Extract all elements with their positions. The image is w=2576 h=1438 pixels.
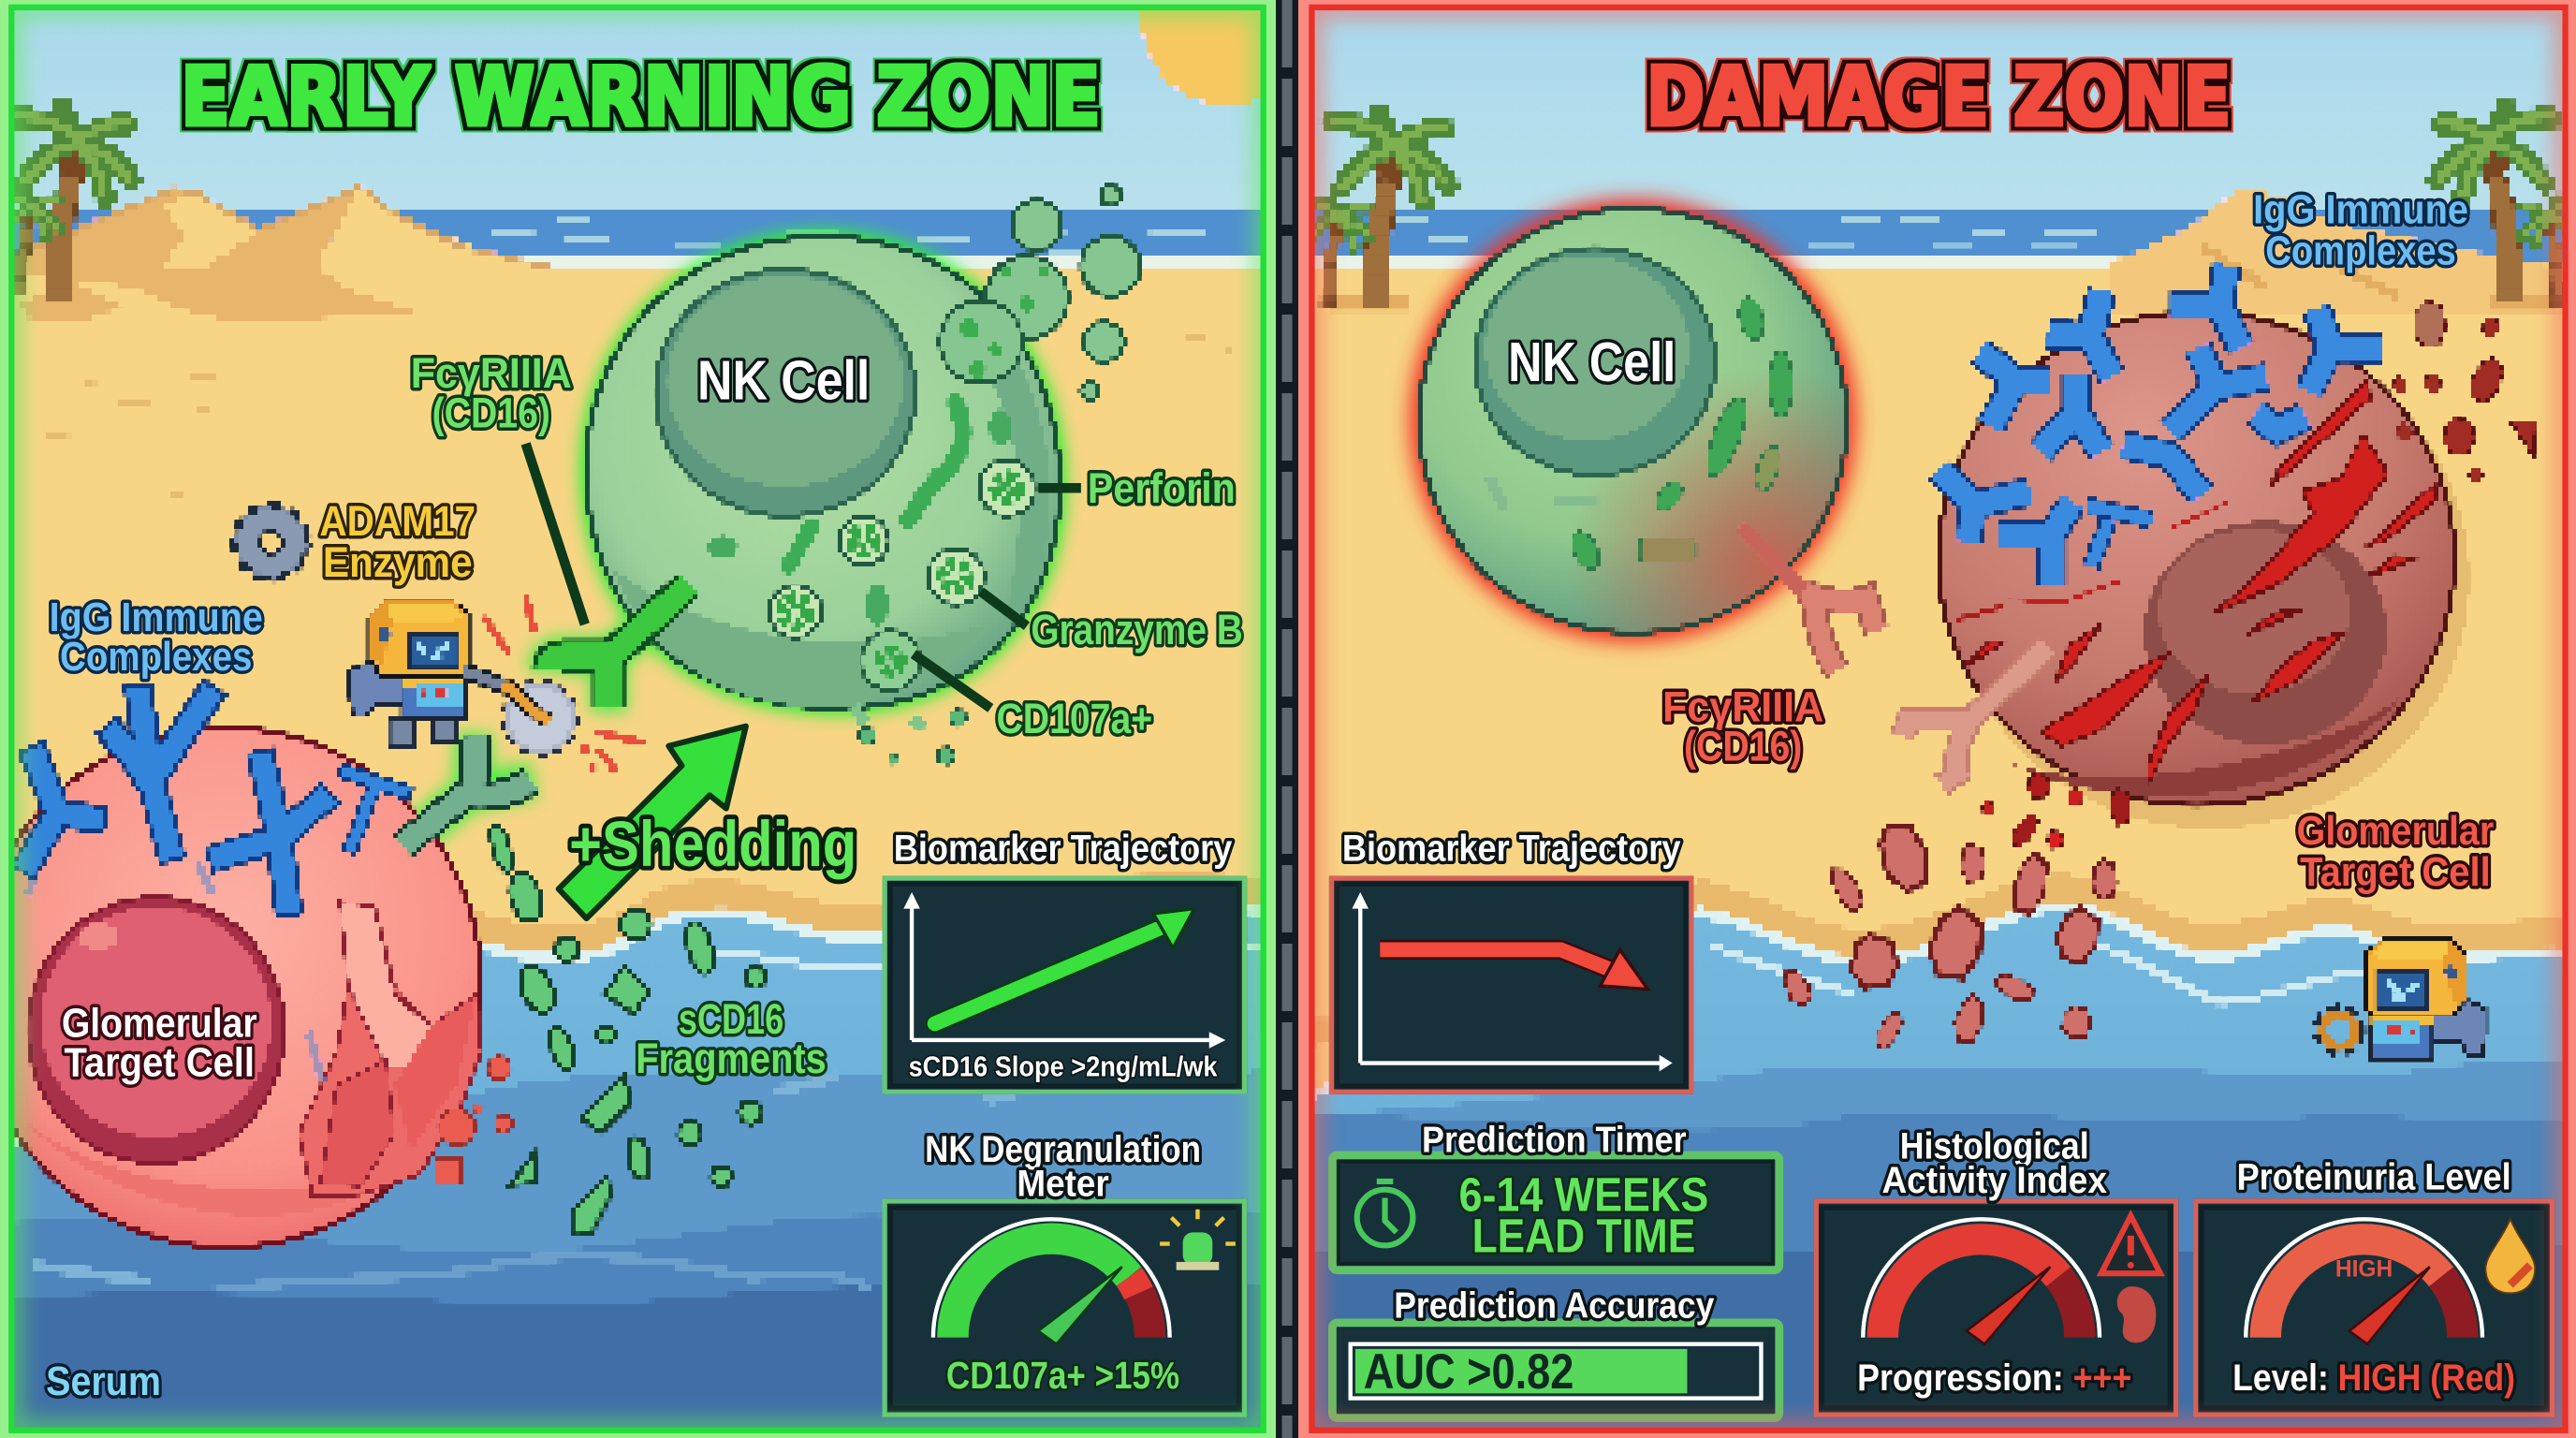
label serum: Serum <box>46 1358 161 1404</box>
fragments left <box>487 822 766 1236</box>
ground shadow <box>1950 329 2469 829</box>
NK degranulation meter: NK Degranulation <box>925 1129 1201 1170</box>
target cell right <box>1939 312 2454 805</box>
robot right <box>2320 940 2485 1058</box>
line to CD16 <box>526 444 585 624</box>
prediction timer: Prediction Timer <box>1422 1120 1687 1160</box>
label Granzyme B: Granzyme B <box>1031 606 1243 653</box>
label Perforin: Perforin <box>1088 464 1236 512</box>
drop icon <box>2485 1219 2535 1293</box>
label FcγRIIIA right: FcγRIIIA <box>1662 682 1823 730</box>
title right: DAMAGE ZONE <box>1647 49 2231 144</box>
receptor wrench left <box>548 583 690 709</box>
NK degranulation meter <box>882 1129 1247 1417</box>
biomarker trajectory left <box>882 829 1247 1094</box>
panel: early warning zone <box>0 0 1312 1438</box>
histological activity index: Activity Index <box>1881 1160 2107 1201</box>
label FcγRIIIA left: FcγRIIIA <box>411 349 572 397</box>
antibodies left <box>30 698 404 902</box>
red slashes <box>1954 382 2438 785</box>
NK cell glow <box>400 230 1066 849</box>
label CD107a: CD107a+ <box>996 695 1152 742</box>
prediction timer: LEAD TIME <box>1472 1209 1695 1262</box>
NK degranulation meter: Meter <box>1017 1164 1109 1205</box>
label glomerular left: Target Cell <box>64 1040 255 1086</box>
biomarker trajectory left: sCD16 Slope >2ng/mL/wk <box>909 1050 1218 1083</box>
NK cell left <box>587 185 1140 764</box>
label NK cell right: NK Cell <box>1508 330 1676 393</box>
histological activity index <box>1814 1125 2178 1417</box>
centre divider <box>1276 0 1298 1438</box>
receptor right <box>1740 526 1876 670</box>
proteinuria level: Level: HIGH (Red) <box>2232 1357 2515 1399</box>
vesicles <box>940 185 1140 399</box>
label FcγRIIIA left: (CD16) <box>432 389 550 436</box>
histological activity index: Progression: +++ <box>1857 1357 2131 1399</box>
proteinuria level: HIGH <box>2335 1257 2393 1283</box>
frame left <box>0 0 1277 1438</box>
label IgG right: IgG Immune <box>2253 187 2468 233</box>
label sCD16 fragments: Fragments <box>636 1034 827 1082</box>
proteinuria level: Proteinuria Level <box>2237 1157 2511 1198</box>
arrow +shedding <box>559 726 746 918</box>
label +Shedding: +Shedding <box>569 808 856 880</box>
label FcγRIIIA right: (CD16) <box>1684 723 1802 770</box>
biomarker trajectory right: Biomarker Trajectory <box>1342 829 1681 870</box>
prediction accuracy <box>1332 1286 1779 1418</box>
biomarker trajectory left: Biomarker Trajectory <box>894 829 1232 870</box>
label sCD16 fragments: sCD16 <box>679 995 783 1043</box>
NK degranulation meter: CD107a+ >15% <box>946 1354 1179 1397</box>
granules <box>768 460 1035 690</box>
stopwatch icon <box>1357 1181 1412 1245</box>
histological activity index: Histological <box>1900 1125 2089 1167</box>
prediction timer <box>1332 1120 1779 1270</box>
label IgG left: IgG Immune <box>50 594 263 640</box>
prediction accuracy: Prediction Accuracy <box>1394 1286 1715 1327</box>
gear icon <box>237 507 305 577</box>
line to Perforin <box>1038 485 1081 491</box>
organelles <box>909 403 962 520</box>
panel: damage zone <box>1298 0 2576 1438</box>
target cell left <box>0 728 481 1247</box>
label ADAM17: ADAM17 <box>319 497 476 545</box>
beach background right <box>1298 0 2576 1438</box>
illustration right <box>1419 209 2537 1058</box>
debris lower <box>1778 817 2116 1051</box>
debris upper <box>1982 301 2537 850</box>
beacon icon <box>1160 1210 1236 1270</box>
second receptor right <box>1902 648 2047 785</box>
label glomerular right: Glomerular <box>2297 808 2494 854</box>
frame right <box>1298 0 2576 1438</box>
NK cell glow right <box>1410 198 1856 642</box>
illustration left <box>0 185 1140 1247</box>
title left: EARLY WARNING ZONE <box>181 49 1101 144</box>
label NK cell left: NK Cell <box>697 348 870 411</box>
sparks <box>484 596 644 772</box>
NK cell right <box>1419 209 1847 633</box>
line to Granzyme B <box>981 592 1027 626</box>
fragments red <box>435 1057 513 1184</box>
fragment wrench <box>402 737 531 846</box>
prediction accuracy: AUC >0.82 <box>1364 1344 1573 1400</box>
antibodies right <box>1940 266 2381 584</box>
label glomerular left: Glomerular <box>62 1000 257 1046</box>
label ADAM17: Enzyme <box>323 538 473 586</box>
biomarker trajectory right <box>1329 829 1694 1094</box>
label IgG left: Complexes <box>60 634 252 680</box>
saw gear <box>506 683 575 753</box>
left shore <box>460 873 1275 1151</box>
prediction timer: 6-14 WEEKS <box>1459 1168 1708 1222</box>
right shore <box>1298 874 2576 1051</box>
label glomerular right: Target Cell <box>2300 849 2491 895</box>
proteinuria level <box>2193 1157 2554 1417</box>
label IgG right: Complexes <box>2265 228 2456 274</box>
orange tool <box>503 683 549 723</box>
kidney icon <box>2117 1286 2156 1343</box>
line to CD107a <box>914 654 990 708</box>
beach background left <box>0 0 1312 1438</box>
warning triangle icon <box>2101 1216 2160 1273</box>
robot left <box>350 601 506 746</box>
dunes left <box>17 187 419 322</box>
